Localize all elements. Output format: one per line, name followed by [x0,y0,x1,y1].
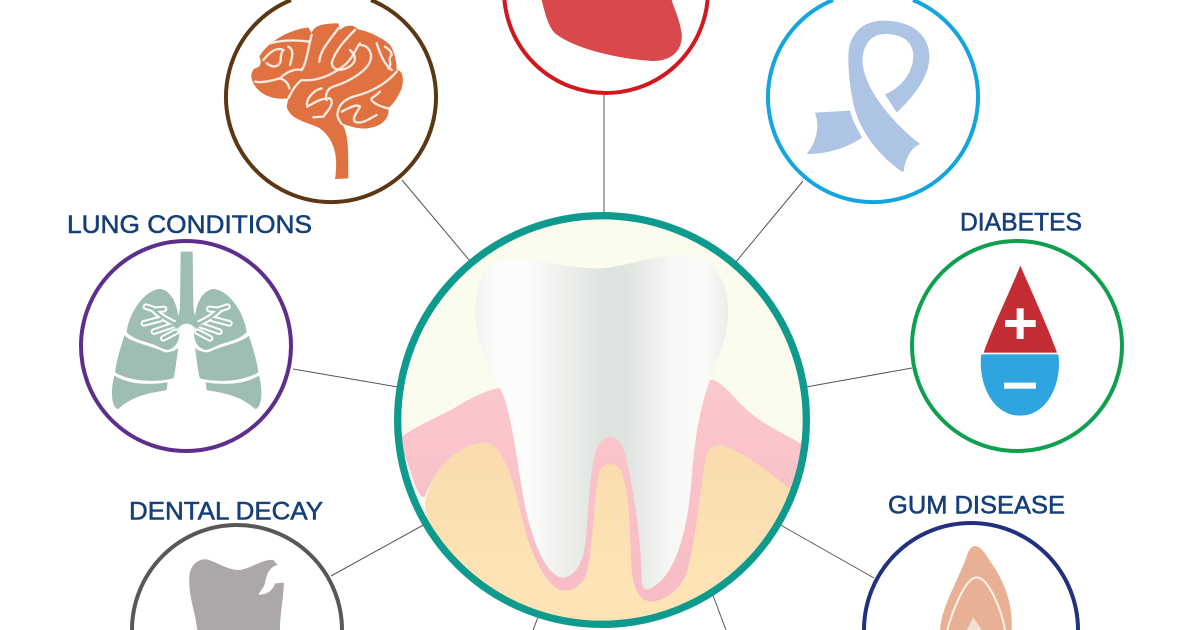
ring [912,241,1122,451]
ring [81,241,291,451]
icon: ribbon [807,21,929,173]
panel: gum disease [864,523,1078,630]
connector lines [293,95,912,630]
icon: gum cross-section [940,546,1012,630]
gum [397,380,807,602]
ring [226,0,436,202]
icon: lungs [112,252,261,409]
panel: dental decay [132,525,342,630]
right lung [194,289,261,409]
icon: brain [251,23,403,179]
heading: diabetes: DIABETES [960,208,1082,236]
left lung [112,289,179,409]
ring [768,0,978,202]
ring [132,525,342,630]
icon: decayed tooth [189,559,284,630]
panel: central tooth illustration [390,216,823,630]
tooth [475,254,728,589]
heading: gum disease: GUM DISEASE [888,492,1065,520]
icon: blood drop [981,266,1059,416]
ring [504,0,708,93]
icon: heart [542,0,682,61]
main circle ring [398,216,806,624]
panel: brain [226,0,436,202]
panel: lungs [81,241,291,451]
ring [864,523,1078,630]
heading: lung conditions: LUNG CONDITIONS [67,211,312,239]
jaw bone [425,442,794,621]
panel: diabetes [912,241,1122,451]
panel: heart [504,0,708,93]
heading: dental decay: DENTAL DECAY [129,498,323,526]
panel: cancer ribbon [768,0,978,202]
trachea [173,252,201,329]
